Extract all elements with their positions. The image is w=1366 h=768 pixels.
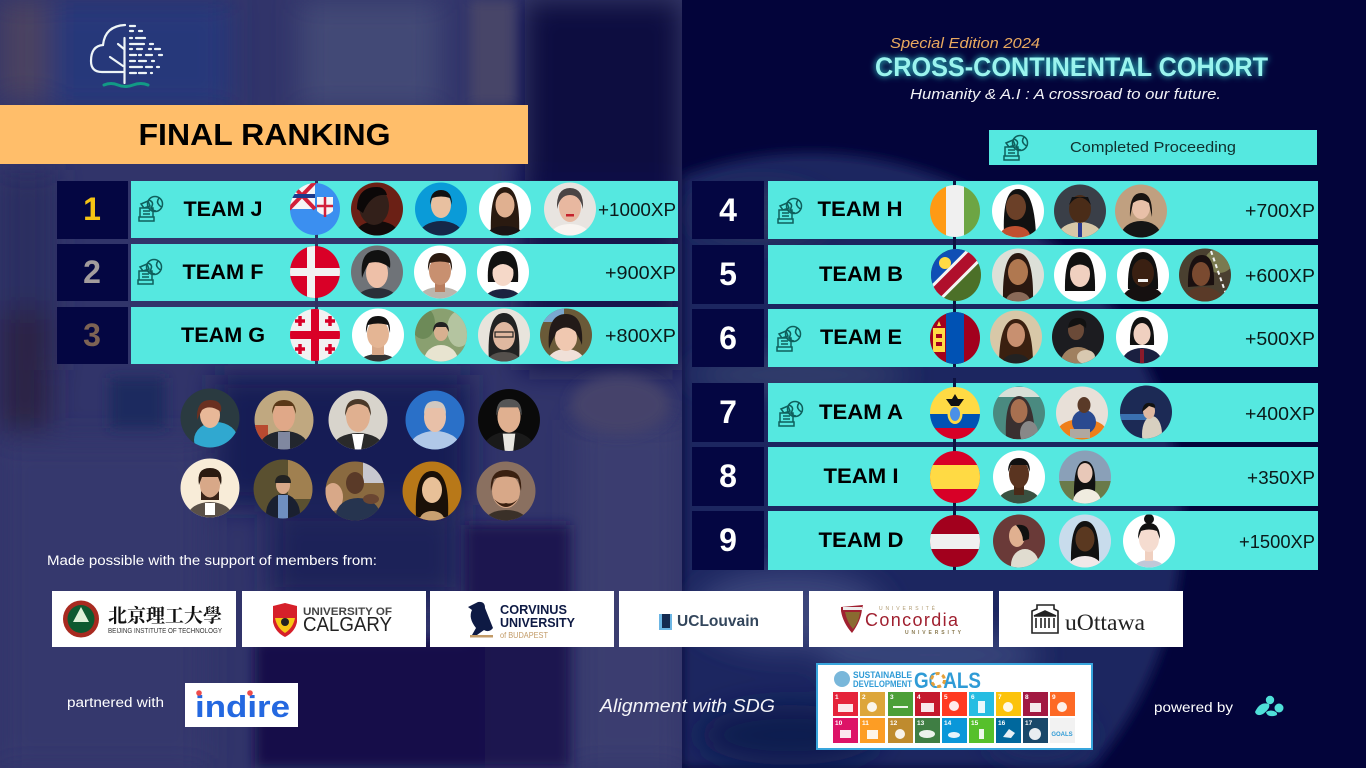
row 8: team I: +350XP [1247,467,1315,488]
logo: University of Calgary [242,591,426,647]
row 1: team J: 1 [83,191,101,227]
row 4: team H: TEAM H [818,198,902,221]
legend: completed proceeding: Completed Proceeding [1070,140,1236,156]
row 9: team D: TEAM D [818,529,904,552]
heading: edition label: Special Edition 2024 [890,35,1040,52]
logo: UCLouvain [619,591,803,647]
partner label: partnered with [67,695,164,710]
SDG alignment label: Alignment with SDG [599,696,775,716]
row 1: team J: TEAM J [184,198,262,221]
logo: University of Calgary: CALGARY [303,614,392,636]
row 2: team F: 2 [83,254,101,290]
logo: Concordia University: UNIVERSITÉ [879,605,936,612]
logo: University of Calgary: UNIVERSITY OF [303,606,392,618]
support text: Made possible with the support of members from: [47,553,377,568]
logo: indire: indire [195,689,290,724]
panel: sustainable development goals: 10 [835,720,843,727]
row 3: team G: TEAM G [181,324,265,347]
heading: final ranking banner: FINAL RANKING [138,117,390,152]
row 5: team B: TEAM B [819,263,903,286]
logo: Beijing Institute of Technology [52,591,236,647]
row 7: team A: 7 [719,394,737,430]
row 3: team G: 3 [83,317,101,353]
logo: data tree [91,25,162,86]
panel: sustainable development goals: 15 [971,720,979,727]
panel: sustainable development goals: 9 [1052,694,1056,701]
row 2: team F: TEAM F [182,261,264,284]
panel: sustainable development goals: SUSTAINABLE [853,670,912,681]
row 7: team A: TEAM A [819,401,903,424]
panel: sustainable development goals: 16 [998,720,1006,727]
row 5: team B: +600XP [1245,265,1315,286]
logo: Concordia University: UNIVERSITY [905,630,962,636]
row 7: team A: +400XP [1245,403,1315,424]
panel: sustainable development goals [817,664,1092,749]
panel: sustainable development goals: GOALS [1051,732,1073,738]
row 7: team A [692,378,1318,442]
panel: sustainable development goals: 6 [971,694,975,701]
row 1: team J [57,181,678,239]
logo: Corvinus University: CORVINUS [500,602,567,617]
panel: sustainable development goals: 8 [1025,694,1029,701]
logo: Corvinus University: UNIVERSITY [500,615,575,630]
logo: UCLouvain: UCLouvain [677,613,759,630]
logo: Corvinus University [430,591,614,647]
row 6: team E [692,304,1318,367]
logo: Beijing Institute of Technology: 北京理工大學 [108,601,222,628]
subtitle: Humanity & A.I : A crossroad to our future. [910,86,1221,103]
panel: sustainable development goals: 4 [917,694,921,701]
logo: Beijing Institute of Technology: BEIJING INSTITUTE OF TECHNOLOGY [108,628,222,635]
row 3: team G [57,307,678,364]
logo: Corvinus University: of BUDAPEST [500,630,548,640]
row 2: team F: +900XP [605,262,676,283]
row 5: team B: 5 [719,256,737,292]
panel: sustainable development goals: 13 [917,720,925,727]
row 8: team I: TEAM I [824,465,898,488]
panel: sustainable development goals: 14 [944,720,952,727]
mentors: photo rows [180,388,540,534]
row 3: team G: +800XP [605,325,676,346]
icon: powered by mark [1255,696,1284,716]
row 9: team D: +1500XP [1239,531,1315,552]
row 8: team I: 8 [719,458,737,494]
ranking table: top three [57,179,678,377]
panel: sustainable development goals: 2 [862,694,866,701]
ranking table: places four to six [692,181,1318,377]
panel: sustainable development goals: 1 [835,694,839,701]
row 4: team H: +700XP [1245,200,1315,221]
background: left team photo [0,0,682,768]
panel: sustainable development goals: GOALS [914,668,981,693]
logo: uOttawa: uOttawa [1065,610,1145,635]
row 6: team E: TEAM E [820,326,902,349]
title: cross-continental cohort: CROSS-CONTINENTAL COHORT [875,52,1268,82]
panel: sustainable development goals: 11 [862,720,869,727]
powered by label: powered by [1154,700,1233,715]
background: right space and earth [682,148,1186,768]
row 6: team E: +500XP [1245,328,1315,349]
row 8: team I [692,442,1318,506]
row 2: team F [57,244,678,301]
logo: uOttawa [999,591,1183,647]
logo: Concordia University: Concordia [865,610,959,630]
panel: sustainable development goals: 17 [1025,720,1033,727]
row 5: team B [692,239,1318,304]
panel: sustainable development goals: 3 [890,694,894,701]
heading: final ranking banner [0,105,528,164]
row 6: team E: 6 [719,320,737,356]
panel: sustainable development goals: 5 [944,694,948,701]
panel: sustainable development goals: DEVELOPMENT [853,679,912,690]
row 9: team D: 9 [719,522,737,558]
row 4: team H [692,181,1318,239]
panel: sustainable development goals: 7 [998,694,1002,701]
logo: Concordia University [809,591,993,647]
ranking table: places seven to nine [692,378,1318,581]
row 4: team H: 4 [719,192,737,228]
panel: sustainable development goals: 12 [890,720,898,727]
row 1: team J: +1000XP [598,199,676,220]
row 9: team D [692,506,1318,570]
title: cross-continental cohort: CROSS-CONTINENTAL COHORT [875,52,1268,82]
legend: completed proceeding [989,130,1317,165]
logo: indire [185,683,298,727]
